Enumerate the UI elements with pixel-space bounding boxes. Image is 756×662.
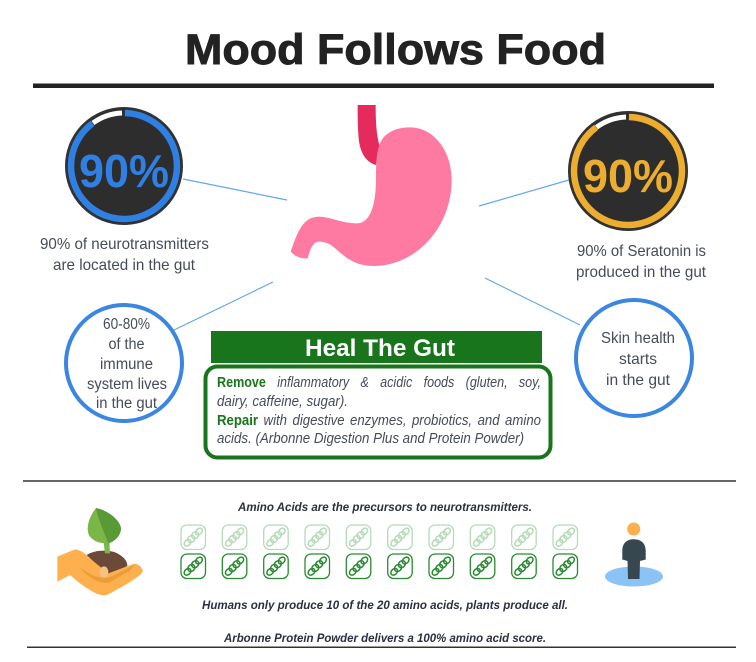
text box: Remove inflammatory & acidic foods (gluten, soy, xyxy=(217,375,541,391)
callout: immune system: in the gut xyxy=(96,395,158,412)
title: Mood Follows Food xyxy=(185,26,606,74)
panel: heal the gut xyxy=(206,331,550,458)
caption xyxy=(576,243,707,281)
heading: Heal The Gut xyxy=(305,335,455,362)
text: amino acids: Amino Acids are the precursors to neurotransmitters. xyxy=(237,500,532,514)
caption: produced in the gut xyxy=(576,264,707,281)
top row, faded xyxy=(181,525,578,550)
stat: neurotransmitters xyxy=(40,108,209,274)
caption xyxy=(40,236,209,274)
text: humans: Humans only produce 10 of the 20 amino acids, plants produce all. xyxy=(202,598,568,612)
callout: skin health: starts xyxy=(619,351,657,368)
caption: 90% of Seratonin is xyxy=(577,243,706,260)
connector lines xyxy=(172,179,580,331)
text box: dairy, caffeine, sugar). xyxy=(217,394,348,410)
icon: plant in hand xyxy=(57,508,143,595)
progress ring xyxy=(573,116,683,226)
callout: immune system xyxy=(66,305,182,421)
heading xyxy=(211,331,542,363)
callout: immune system: 60-80% xyxy=(103,316,150,333)
text box xyxy=(206,366,550,458)
text box: Repair with digestive enzymes, probiotics, and amino xyxy=(217,413,541,429)
bottom rule xyxy=(27,646,736,648)
callout: immune system: system lives xyxy=(87,376,167,393)
icon: person xyxy=(605,522,663,586)
callout: skin health: in the gut xyxy=(606,372,671,389)
value: 90% xyxy=(583,150,673,202)
callout: skin health: Skin health xyxy=(601,330,675,347)
text box: acids. (Arbonne Digestion Plus and Protein Powder) xyxy=(217,431,524,447)
icon: stomach xyxy=(291,105,452,266)
title rule xyxy=(33,84,714,88)
value: 90% xyxy=(79,145,169,197)
callout: immune system: of the xyxy=(108,336,144,353)
caption: are located in the gut xyxy=(53,257,196,274)
text: protein powder: Arbonne Protein Powder delivers a 100% amino acid score. xyxy=(223,631,546,645)
callout: skin health xyxy=(576,300,692,416)
stat: seratonin xyxy=(569,112,707,281)
icon grid: amino acids xyxy=(181,525,578,578)
callout: immune system: immune xyxy=(100,356,153,373)
bottom row, solid xyxy=(181,554,578,578)
progress ring xyxy=(70,112,178,220)
caption: 90% of neurotransmitters xyxy=(40,236,209,253)
section divider xyxy=(23,480,736,482)
